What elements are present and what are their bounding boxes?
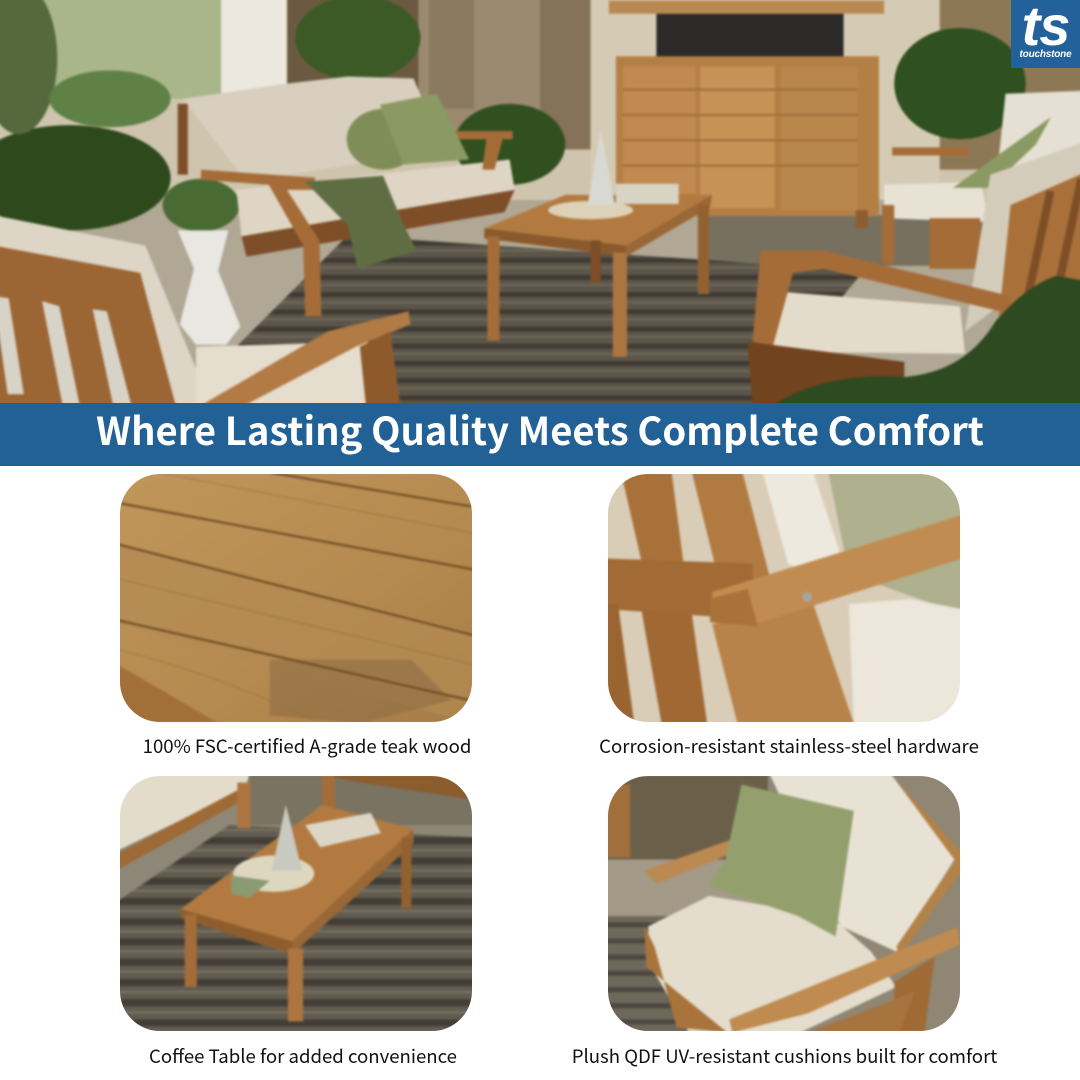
- sofa: [183, 77, 444, 182]
- caption: hardware: Corrosion-resistant stainless-steel hardware: [599, 732, 979, 759]
- foreground foliage right: [773, 276, 1080, 405]
- logo: touchstone: [1011, 0, 1080, 68]
- caption: cushions: Plush QDF UV-resistant cushions built for comfort: [572, 1042, 997, 1069]
- photo: stainless-steel hardware on armrest: [608, 474, 960, 722]
- caption: teak: 100% FSC-certified A-grade teak wood: [143, 732, 471, 759]
- logo wordmark: touchstone: [1020, 49, 1071, 60]
- cushions & throw: [347, 109, 420, 170]
- right back armchair: [995, 91, 1080, 190]
- title banner: Where Lasting Quality Meets Complete Comfort: [96, 402, 984, 457]
- plants: [0, 125, 171, 230]
- floor: [0, 200, 1080, 405]
- front left armchair: [0, 215, 211, 405]
- sideboard: [609, 1, 884, 14]
- title banner: [0, 403, 1080, 466]
- caption: coffee table: Coffee Table for added convenience: [149, 1042, 457, 1069]
- coffee table: [484, 195, 712, 246]
- photo: teak wood planks: [120, 474, 472, 722]
- right front armchair: [965, 141, 1080, 332]
- white side table: [178, 230, 240, 345]
- rug: [226, 235, 864, 405]
- hero photo: teak patio living room: [0, 0, 1080, 403]
- photo: coffee table: [120, 776, 472, 1031]
- photo: cushioned armchair: [608, 776, 960, 1031]
